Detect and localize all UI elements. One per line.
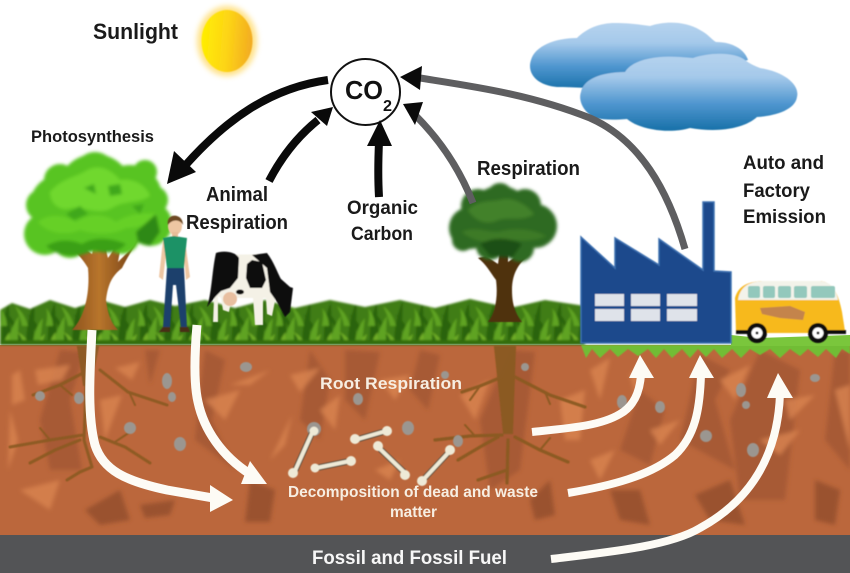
soil layer [0, 345, 850, 535]
bus [735, 281, 846, 343]
fossil fuel band [0, 535, 850, 573]
right-side green grass [581, 345, 850, 358]
tree roots left [10, 347, 167, 480]
bone 3 [350, 426, 392, 444]
label: decomposition [288, 484, 538, 521]
label: animal respiration: Respiration [186, 212, 288, 234]
CO2 circle: 2 [383, 98, 392, 115]
white arrow: fossil fuel to emission [551, 373, 793, 559]
sun [197, 6, 257, 76]
label: organic carbon: Organic [347, 197, 418, 219]
body and legs [213, 254, 276, 325]
man [159, 216, 190, 332]
black arrow: animal respiration [269, 107, 333, 181]
white arrow: root respiration to factory [532, 355, 654, 432]
bone 5 [417, 445, 455, 486]
gray arrow: respiration [403, 102, 473, 203]
white arrow: tree to decomposition [90, 330, 233, 512]
roof [738, 281, 838, 300]
label: auto and factory emission: Auto and [743, 152, 824, 174]
clouds [530, 23, 797, 131]
cloud front [580, 54, 797, 131]
nose spot [236, 290, 244, 294]
grass strip [0, 299, 585, 345]
flower decoration [760, 306, 805, 320]
label: sunlight: Sunlight [93, 19, 178, 44]
tree: photosynthesis [24, 152, 172, 330]
label: photosynthesis: Photosynthesis [31, 128, 154, 146]
crown [449, 183, 557, 262]
building [581, 202, 731, 343]
window 3 [667, 294, 697, 321]
head [168, 217, 182, 235]
label: decomposition: Decomposition of dead and waste [288, 484, 538, 501]
bone 1 [288, 426, 318, 478]
gray arrow: factory emission [400, 66, 685, 249]
window 1 [595, 294, 624, 321]
black arrow: organic carbon [367, 120, 392, 197]
label: animal respiration: Animal [206, 184, 268, 206]
grass under bus [731, 335, 850, 346]
window 2 [631, 294, 660, 321]
label: fossil and fossil fuel: Fossil and Fossil Fuel [312, 548, 507, 569]
crown [24, 152, 172, 258]
wheels [747, 323, 828, 343]
trunk [478, 250, 530, 322]
soil texture patches [8, 350, 850, 525]
windows [748, 286, 835, 298]
cloud back [530, 23, 748, 90]
black patches [207, 252, 293, 317]
label: root respiration: Root Respiration [320, 374, 462, 393]
label: auto and factory emission: Factory [743, 180, 810, 202]
shirt [163, 236, 187, 268]
trunk and branches [60, 234, 139, 330]
CO2 circle [331, 59, 400, 125]
bone 2 [310, 456, 356, 472]
stones [35, 362, 820, 457]
label: auto and factory emission [743, 152, 826, 228]
label: auto and factory emission: Emission [743, 206, 826, 228]
cow [207, 252, 293, 325]
label: decomposition: matter [390, 504, 437, 521]
bones [288, 426, 455, 486]
arms [159, 240, 190, 280]
factory [581, 202, 731, 343]
bumpers [736, 330, 846, 334]
white arrow: animal to decomposition [195, 325, 267, 484]
jeans [163, 268, 187, 328]
label: respiration: Respiration [477, 158, 580, 180]
label: animal respiration [186, 184, 288, 234]
label: organic carbon: Carbon [351, 223, 413, 245]
CO2 circle: CO [345, 75, 383, 105]
shoes [159, 327, 190, 332]
tree: respiration [449, 183, 557, 322]
udder [223, 292, 237, 306]
tree roots right [435, 347, 585, 483]
label: organic carbon [347, 197, 418, 245]
white arrow: decomposition to factory [568, 355, 714, 493]
black arrow: CO2 to tree [167, 80, 328, 184]
body [735, 281, 845, 333]
bone 4 [373, 441, 410, 480]
